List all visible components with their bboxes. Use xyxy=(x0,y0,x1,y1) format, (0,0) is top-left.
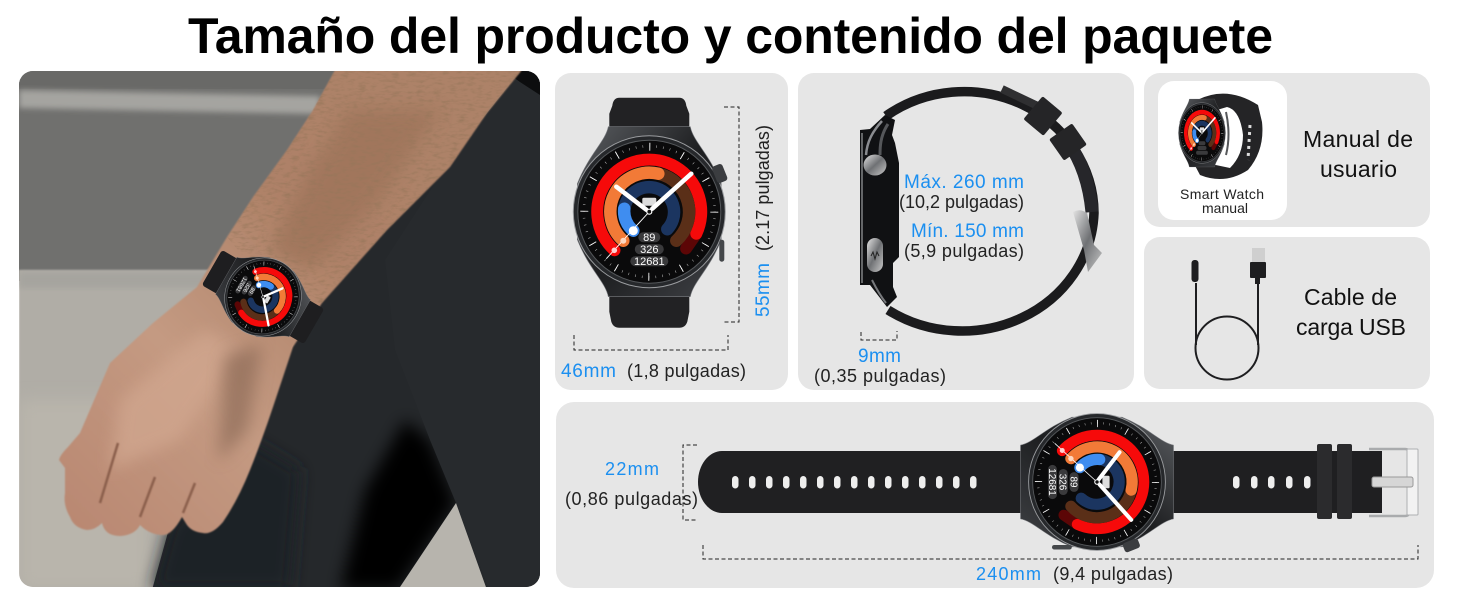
band length labels: Máx. 260 mm xyxy=(904,172,1024,193)
face readouts: 89 xyxy=(1067,476,1078,488)
strap holes xyxy=(732,476,1310,488)
watch face xyxy=(215,256,311,338)
face readouts: 89 xyxy=(247,286,255,294)
buckle xyxy=(1369,449,1418,516)
width label xyxy=(561,361,746,382)
thickness dimension bracket xyxy=(861,331,897,340)
face readouts xyxy=(236,277,255,294)
band length labels xyxy=(899,172,1024,261)
manual booklet: manual xyxy=(1202,200,1248,216)
width dimension bracket xyxy=(574,335,728,350)
face readouts: 326 xyxy=(640,244,658,256)
face readouts xyxy=(634,232,665,268)
cable label: Cable de xyxy=(1304,284,1397,310)
cable label xyxy=(1296,284,1406,340)
face readouts: 12681 xyxy=(234,276,247,293)
height label: 55mm xyxy=(753,263,774,317)
face readouts: 326 xyxy=(241,282,251,293)
face readouts: 12681 xyxy=(634,256,665,268)
cable label: carga USB xyxy=(1296,314,1406,340)
strap xyxy=(609,98,689,328)
width label: 46mm xyxy=(561,361,616,382)
watch face rotated xyxy=(1020,414,1174,553)
strap clasp xyxy=(1073,210,1102,272)
strap length label: (9,4 pulgadas) xyxy=(1053,564,1173,584)
strap length label xyxy=(976,564,1173,584)
width label: (1,8 pulgadas) xyxy=(627,361,746,381)
thickness label: (0,35 pulgadas) xyxy=(814,366,946,386)
strap loop xyxy=(886,89,1102,331)
face readouts: 12681 xyxy=(1046,468,1057,496)
manual label: usuario xyxy=(1320,156,1397,182)
arm and hand xyxy=(59,70,522,536)
watch on wrist xyxy=(202,251,323,343)
cable illustration xyxy=(1192,248,1266,380)
strap width label xyxy=(565,459,698,509)
flat watch with strap xyxy=(698,414,1418,553)
strap xyxy=(202,250,324,344)
panel: USB charging cable xyxy=(1144,237,1430,389)
strap width label: (0,86 pulgadas) xyxy=(565,489,698,509)
panel: watch strap length xyxy=(556,402,1434,588)
manual label xyxy=(1303,126,1413,182)
strap keepers xyxy=(1023,96,1063,136)
height label xyxy=(753,125,774,317)
height label: (2.17 pulgadas) xyxy=(753,125,773,251)
panel: watch side view with strap range xyxy=(798,73,1134,390)
face readouts: 89 xyxy=(643,232,655,244)
strap keepers xyxy=(1317,444,1332,519)
height dimension bracket xyxy=(724,107,739,322)
manual watch illustration xyxy=(1178,94,1262,179)
manual label: Manual de xyxy=(1303,126,1413,152)
right strap xyxy=(1160,451,1382,513)
band length labels: (5,9 pulgadas) xyxy=(904,241,1024,261)
forearm hair texture xyxy=(220,70,522,310)
crown xyxy=(711,163,728,184)
manual booklet: Smart Watch xyxy=(1180,186,1264,202)
panel: watch front dimensions xyxy=(555,73,788,390)
manual booklet xyxy=(1158,81,1287,220)
photo background xyxy=(19,71,540,595)
strap width bracket xyxy=(683,445,697,520)
panel: lifestyle photo of watch on wrist xyxy=(19,70,545,595)
band length labels: Mín. 150 mm xyxy=(911,221,1024,242)
thickness label: 9mm xyxy=(858,346,901,367)
thickness label xyxy=(814,346,946,386)
side button xyxy=(867,238,883,272)
watch body side view xyxy=(860,115,899,307)
side button xyxy=(719,240,724,262)
watch front view xyxy=(573,98,728,328)
strap width label: 22mm xyxy=(605,459,659,479)
crown xyxy=(864,154,886,176)
strap length label: 240mm xyxy=(976,564,1041,584)
strap length bracket xyxy=(703,545,1418,559)
title: Tamaño del producto y contenido del paquete xyxy=(188,8,1273,64)
finger gaps xyxy=(100,443,195,517)
left strap xyxy=(698,451,1035,513)
watch face xyxy=(573,127,725,297)
panel: user manual xyxy=(1144,73,1430,227)
face readouts xyxy=(1046,468,1078,496)
trousers xyxy=(152,71,545,590)
band length labels: (10,2 pulgadas) xyxy=(899,192,1024,212)
face readouts: 326 xyxy=(1057,474,1068,491)
